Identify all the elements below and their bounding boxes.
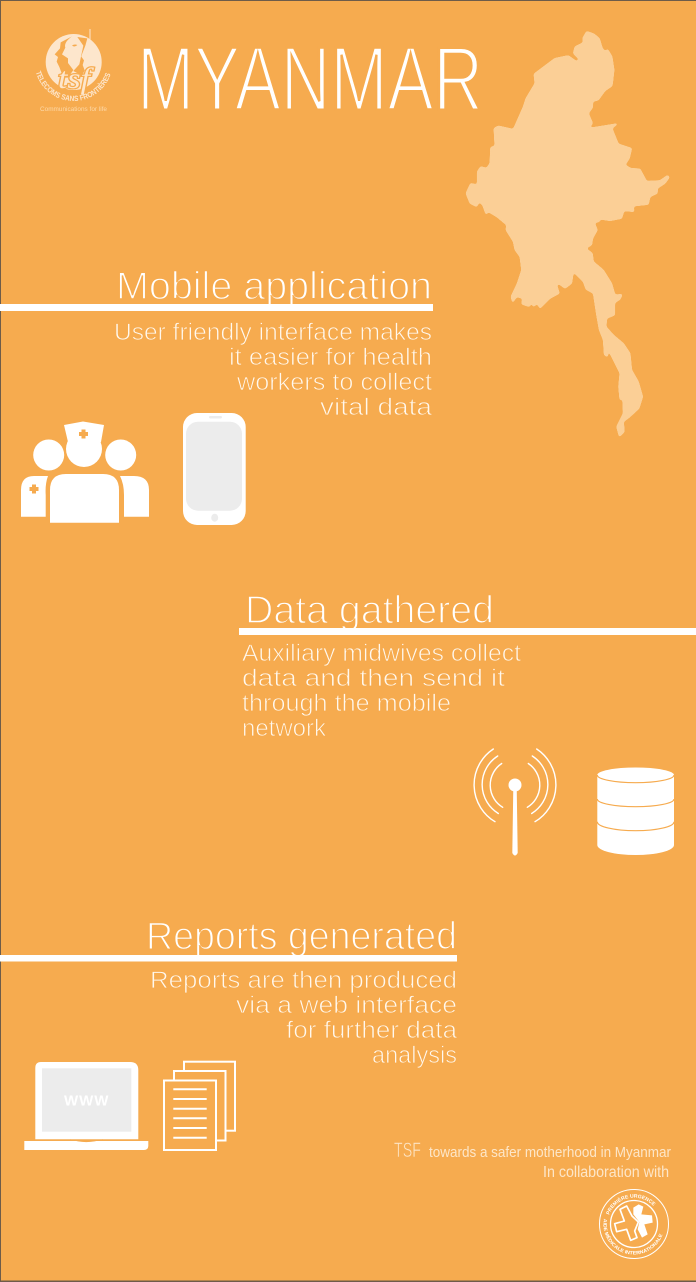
text: data gathered description: [242, 640, 521, 742]
logo: Telecoms Sans Frontieres: tsf: [58, 62, 94, 95]
footer text: TSF: [394, 1139, 421, 1162]
heading: mobile application: Mobile application: [116, 265, 432, 308]
bar: data gathered: [239, 628, 696, 635]
text: data gathered description: through the mobile: [242, 690, 451, 717]
bar: mobile application: [0, 304, 433, 311]
text: reports generated description: Reports are then produced: [150, 967, 457, 994]
text: mobile application description: it easier for health: [229, 344, 432, 371]
section: reports generated: [0, 915, 458, 1069]
text: mobile application description: workers to collect: [236, 369, 432, 396]
icon: database: [597, 767, 674, 855]
icon: laptop: WWW: [64, 1092, 109, 1110]
logo: Premiere Urgence Aide Medicale Internationale: [599, 1189, 669, 1259]
text: reports generated description: analysis: [372, 1042, 457, 1069]
text: reports generated description: for further data: [286, 1017, 458, 1044]
text: data gathered description: network: [242, 715, 327, 742]
footer text: [394, 1139, 671, 1181]
section: mobile application: [0, 265, 433, 421]
icon: documents: [164, 1062, 235, 1150]
text: mobile application description: [114, 319, 433, 421]
footer text: In collaboration with: [543, 1164, 669, 1181]
icon: laptop: [24, 1062, 148, 1150]
text: reports generated description: [150, 967, 458, 1069]
section: data gathered: [239, 589, 696, 742]
map of Myanmar: [466, 31, 669, 437]
text: data gathered description: Auxiliary midwives collect: [242, 640, 521, 667]
heading: data gathered: Data gathered: [245, 589, 494, 632]
heading: reports generated: Reports generated: [146, 915, 457, 958]
icon: smartphone: [183, 413, 246, 525]
footer text: towards a safer motherhood in Myanmar: [429, 1145, 671, 1161]
title: MYANMAR: [137, 29, 483, 130]
text: mobile application description: User friendly interface makes: [114, 319, 432, 346]
bar: reports generated: [0, 955, 457, 962]
logo: Premiere Urgence Aide Medicale Internationale: PREMIÈRE URGENCE: [606, 1194, 656, 1215]
icon: health workers: [21, 422, 149, 523]
text: data gathered description: data and then send it: [242, 665, 505, 692]
logo: Premiere Urgence Aide Medicale Internationale: AIDE MÉDICALE INTERNATIONALE: [603, 1218, 662, 1254]
text: reports generated description: via a web interface: [236, 992, 457, 1019]
logo: Telecoms Sans Frontieres: Communications for life: [40, 106, 107, 113]
logo: Telecoms Sans Frontieres: [36, 29, 110, 113]
logo: Telecoms Sans Frontieres: TELECOMS SANS FRONTIÈRES: [36, 70, 110, 101]
text: mobile application description: vital data: [320, 394, 433, 421]
icon: antenna: [474, 749, 556, 856]
